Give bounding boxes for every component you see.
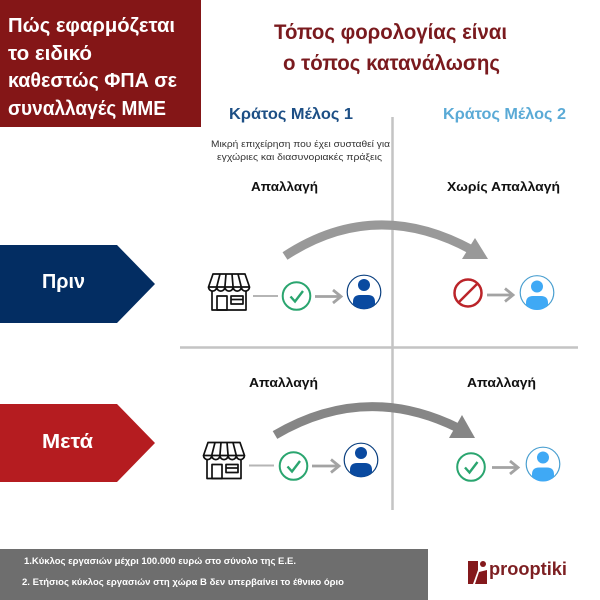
icon: customer state 1 before <box>347 275 381 309</box>
panel: question heading <box>0 0 201 127</box>
heading: member state 1: Κράτος Μέλος 1 <box>229 106 353 123</box>
icon: shop before <box>208 274 250 310</box>
arrow: prohibited to customer <box>487 288 513 302</box>
icon: customer state 2 after <box>526 447 560 482</box>
arrow: curved cross-border before <box>285 225 488 259</box>
title: Τόπος φορολογίας είναι <box>274 21 507 44</box>
text block: small business description: Μικρή επιχείρηση που έχει συσταθεί για <box>211 139 391 150</box>
panel: question heading: συναλλαγές ΜΜΕ <box>8 98 166 120</box>
logo: prooptiki <box>468 559 567 584</box>
arrow banner: after <box>0 404 155 482</box>
text block: small business description: εγχώριες και διασυνοριακές πράξεις <box>217 152 382 163</box>
label: exemption state 2 after: Απαλλαγή <box>467 375 536 390</box>
heading: member state 2: Κράτος Μέλος 2 <box>443 106 566 123</box>
title: ο τόπος κατανάλωσης <box>283 52 500 75</box>
icon: prohibited <box>454 280 482 306</box>
line: shop to check after <box>249 464 274 466</box>
arrow: curved cross-border after <box>275 407 475 438</box>
arrow: check to customer after <box>312 460 339 472</box>
icon: customer state 2 before <box>520 276 554 310</box>
text block: small business description <box>211 139 391 163</box>
panel: conditions <box>0 549 428 600</box>
arrow: check to customer state 2 after <box>492 461 518 474</box>
arrow: check to customer before <box>315 290 341 303</box>
panel: conditions: 2. Ετήσιος κύκλος εργασιών στη χώρα Β δεν υπερβαίνει το έθνικο όριο <box>22 577 345 587</box>
icon: check before <box>283 282 310 310</box>
icon: check state 2 after <box>457 453 485 481</box>
line: shop to check before <box>253 295 278 297</box>
icon: check after <box>280 452 307 480</box>
logo: prooptiki: prooptiki <box>489 559 567 579</box>
label: no exemption state 2 before: Χωρίς Απαλλαγή <box>447 179 560 194</box>
title <box>274 21 507 75</box>
arrow banner: before <box>0 245 155 323</box>
label: exemption state 1 after: Απαλλαγή <box>249 375 318 390</box>
label: exemption state 1 before: Απαλλαγή <box>251 179 318 194</box>
panel: question heading: καθεστώς ΦΠΑ σε <box>8 70 177 92</box>
arrow banner: after: Μετά <box>42 431 94 453</box>
panel: question heading: το ειδικό <box>8 43 92 65</box>
icon: shop after <box>204 442 244 478</box>
icon: customer state 1 after <box>344 443 378 477</box>
arrow banner: before: Πριν <box>42 271 85 293</box>
panel: conditions: 1.Κύκλος εργασιών μέχρι 100.000 ευρώ στο σύνολο της Ε.Ε. <box>24 556 296 566</box>
panel: question heading: Πώς εφαρμόζεται <box>8 15 175 37</box>
